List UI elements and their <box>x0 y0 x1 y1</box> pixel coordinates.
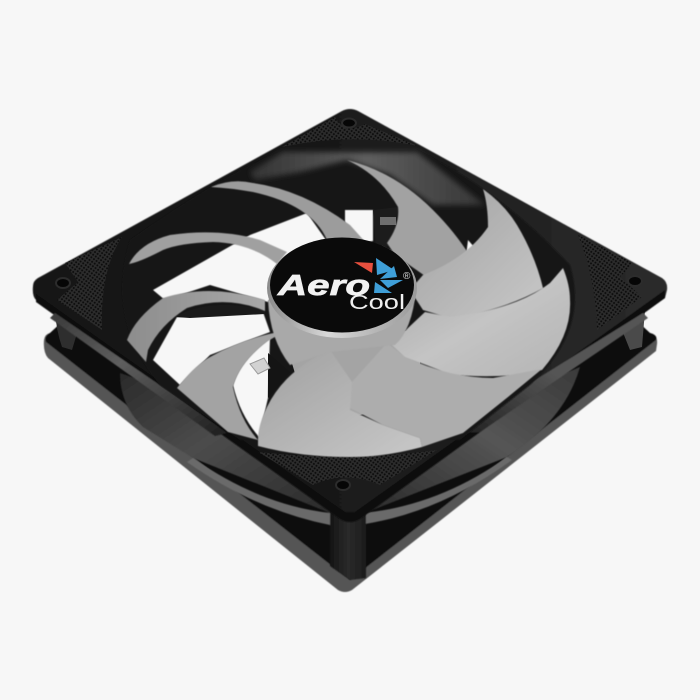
blade: left curved <box>127 291 265 362</box>
blade: left thin <box>129 232 287 264</box>
blade: right <box>392 268 570 376</box>
logo: Cool wordmark: Cool <box>349 292 405 314</box>
bottom plate of fan frame <box>44 322 657 592</box>
blade: lower right <box>350 343 542 447</box>
LED cube <box>250 358 270 374</box>
hub silver rim <box>267 238 417 338</box>
top frame of fan <box>33 109 667 522</box>
mounting holes <box>56 118 642 490</box>
logo: registered mark: ® <box>403 271 411 282</box>
blade: top-left thin <box>211 181 368 245</box>
side wall of fan duct <box>120 367 580 580</box>
corner pillars <box>55 310 645 350</box>
white gaps between blades <box>153 210 475 437</box>
logo: Aero wordmark: Aero <box>277 270 370 302</box>
blade: upper right <box>410 189 543 318</box>
blade: top <box>347 160 470 278</box>
logo: pinwheel mark <box>354 258 403 293</box>
blade: lower left <box>177 331 285 440</box>
blades <box>127 160 570 457</box>
hub base behind blades <box>285 330 420 420</box>
upper duct highlight <box>250 152 485 205</box>
hub logo disc <box>270 238 414 332</box>
central motor strut <box>175 207 398 398</box>
hub cone <box>268 290 416 365</box>
fan duct interior <box>122 150 575 440</box>
blade: bottom <box>258 350 422 457</box>
corner mesh panels <box>57 117 642 485</box>
